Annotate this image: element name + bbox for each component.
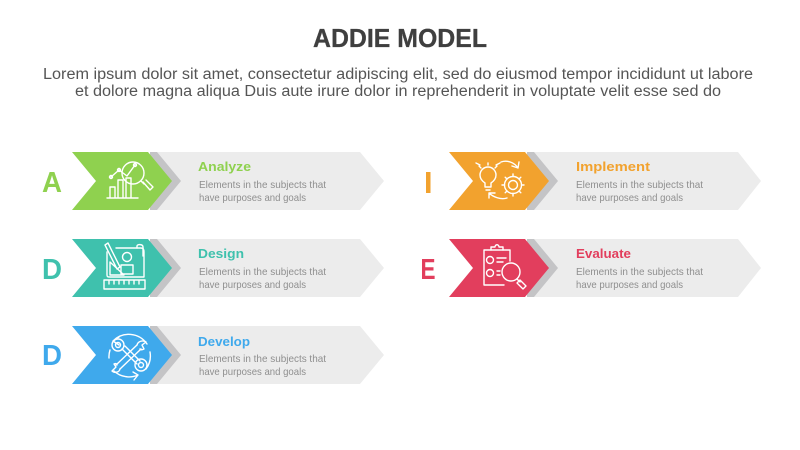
heading: Implement: Implement: [576, 159, 651, 174]
icon: clipboard and magnifier: [484, 245, 526, 289]
heading: Develop: Develop: [198, 334, 250, 349]
description: have purposes and goals: [199, 280, 306, 291]
teal arrow: [72, 239, 172, 297]
panel: Design: [42, 239, 384, 297]
heading: Evaluate: Evaluate: [576, 246, 631, 261]
description: have purposes and goals: [576, 193, 683, 204]
blue arrow: [72, 326, 172, 384]
description: Elements in the subjects that: [199, 354, 326, 365]
description: have purposes and goals: [576, 280, 683, 291]
arrow background: [156, 326, 384, 384]
description: [576, 267, 703, 291]
arrow background: [533, 152, 761, 210]
description: Elements in the subjects that: [576, 267, 703, 278]
icon: blueprint and ruler: [104, 243, 145, 289]
icon: bulb and gear cycle: [476, 161, 524, 199]
letter A: A: [42, 167, 62, 199]
letter D: D: [42, 340, 62, 372]
description: have purposes and goals: [199, 367, 306, 378]
arrow shadow: [150, 152, 181, 210]
arrow shadow: [150, 326, 181, 384]
description: [199, 267, 326, 291]
arrow background: [156, 152, 384, 210]
letter E: E: [420, 254, 436, 286]
arrow shadow: [527, 152, 558, 210]
subtitle text: et dolore magna aliqua Duis aute irure dolor in reprehenderit in voluptate velit esse sed do: [75, 83, 721, 100]
subtitle text: [43, 66, 753, 100]
description: have purposes and goals: [199, 193, 306, 204]
arrow background: [156, 239, 384, 297]
green arrow: [72, 152, 172, 210]
description: [199, 180, 326, 204]
panel: Develop: [42, 326, 384, 384]
letter D: D: [42, 254, 62, 286]
heading: Design: Design: [198, 246, 244, 261]
description: [199, 354, 326, 378]
red arrow: [449, 239, 549, 297]
orange arrow: [449, 152, 549, 210]
arrow shadow: [150, 239, 181, 297]
panel: Evaluate: [420, 239, 761, 297]
letter I: [426, 172, 430, 193]
panel: Analyze: [42, 152, 384, 210]
description: [576, 180, 703, 204]
arrow shadow: [527, 239, 558, 297]
icon: analytics chart with magnifier: [107, 162, 153, 198]
title: ADDIE MODEL: [313, 23, 487, 53]
icon: wrench and cycle arrows: [109, 334, 150, 380]
description: Elements in the subjects that: [199, 180, 326, 191]
description: Elements in the subjects that: [199, 267, 326, 278]
arrow background: [533, 239, 761, 297]
description: Elements in the subjects that: [576, 180, 703, 191]
heading: Analyze: Analyze: [198, 159, 251, 174]
panel: Implement: [426, 152, 761, 210]
subtitle text: Lorem ipsum dolor sit amet, consectetur adipiscing elit, sed do eiusmod tempor incididunt ut labore: [43, 66, 753, 83]
